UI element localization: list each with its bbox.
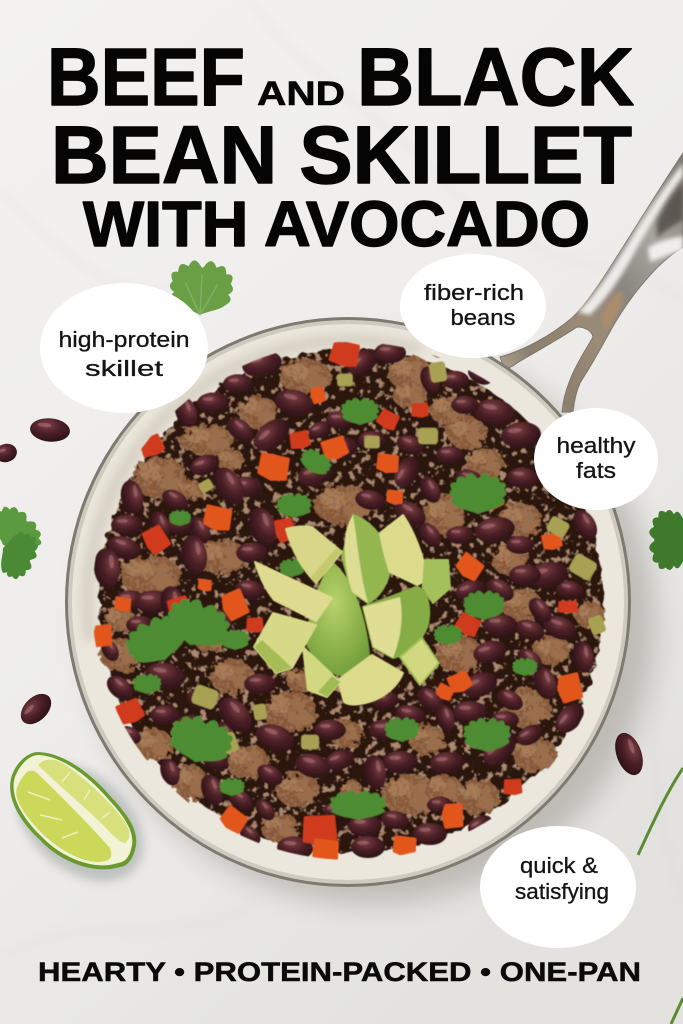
handle warm reflection (602, 292, 623, 330)
avocado center wedge (306, 562, 370, 677)
callout: healthy fats: fats (576, 458, 616, 483)
filler beans (97, 340, 585, 849)
bean: upper left (29, 417, 71, 443)
callout: high-protein skillet: skillet (85, 356, 163, 381)
tagline: HEARTY • PROTEIN-PACKED • ONE-PAN (38, 957, 641, 987)
avocado lower left cube (254, 613, 316, 673)
avocado right slice (363, 587, 429, 658)
callout: high-protein skillet (40, 283, 208, 413)
title line 1: AND (257, 75, 345, 113)
ground beef (100, 356, 605, 843)
title line 1: BLACK (357, 32, 634, 123)
callout: high-protein skillet: high-protein (58, 327, 190, 352)
herb stem right (638, 768, 683, 855)
food base (99, 349, 603, 853)
title line 1 (47, 32, 634, 123)
bell peppers (93, 340, 584, 860)
callout: healthy fats: healthy (556, 433, 636, 458)
callout: fiber-rich beans (400, 254, 546, 358)
skillet handle (500, 153, 683, 412)
avocado long left slice (255, 562, 332, 621)
callout: quick and satisfying: quick & (520, 853, 598, 878)
lime wedge (10, 752, 136, 869)
callout: fiber-rich beans: beans (450, 305, 516, 330)
herb stem bottom (671, 998, 683, 1024)
bean: left edge (0, 441, 19, 465)
callout: healthy fats (534, 408, 658, 510)
pan shadow (85, 340, 655, 904)
skillet (65, 317, 631, 887)
avocado lower right cube (400, 638, 439, 685)
handle upper light band (578, 163, 683, 315)
title (47, 32, 634, 260)
cilantro: left (0, 499, 49, 584)
yellow and green vegetables (190, 361, 607, 755)
handle highlight (648, 236, 683, 262)
callout: quick and satisfying: satisfying (515, 879, 609, 904)
bean: lower left (15, 688, 57, 730)
cilantro: top (168, 259, 234, 317)
handle dark reflection (657, 183, 683, 238)
title line 3: WITH AVOCADO (83, 188, 590, 260)
callout: quick and satisfying (480, 826, 636, 948)
avocado small right cube (423, 560, 450, 603)
title line 2: BEAN SKILLET (51, 110, 632, 201)
cilantro leaves on food (120, 398, 538, 820)
avocado (254, 515, 450, 704)
bean: lower right (610, 729, 648, 779)
callout: fiber-rich beans: fiber-rich (424, 280, 524, 305)
cilantro: right (649, 510, 683, 570)
avocado upper right slice (380, 515, 428, 585)
title line 1: BEEF (47, 32, 245, 123)
black beans (92, 340, 602, 861)
avocado upper center slice (342, 515, 390, 603)
avocado upper left cube (286, 526, 342, 583)
lime shadow (0, 739, 166, 905)
skillet food (92, 340, 607, 861)
avocado lower left wedge (303, 647, 340, 697)
avocado lower slice (338, 655, 403, 704)
